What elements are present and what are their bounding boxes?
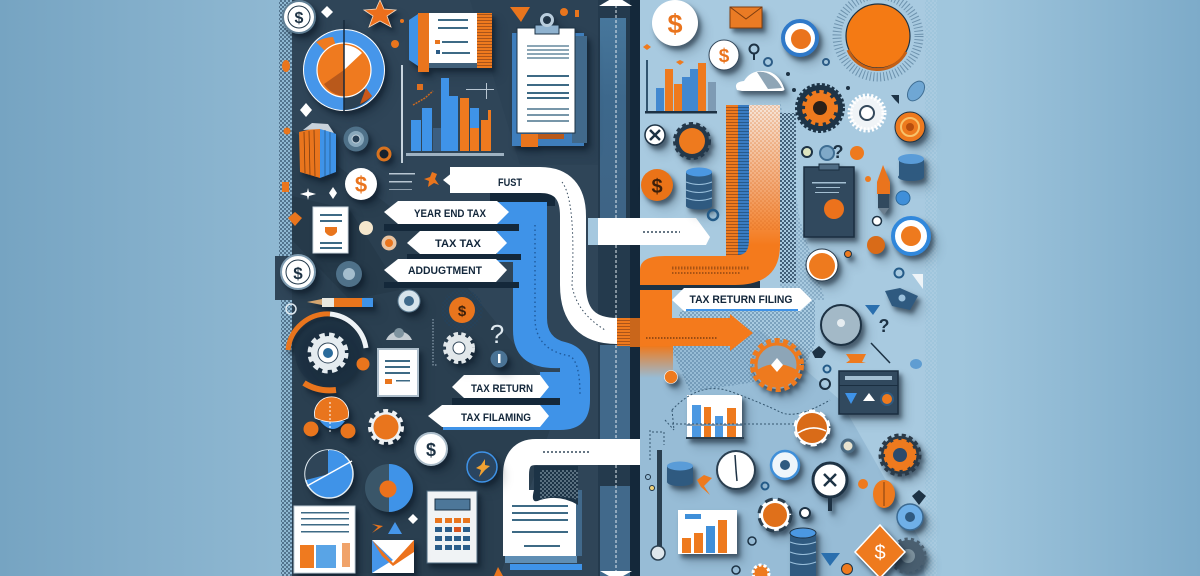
icon: orange badge gear: [795, 411, 829, 445]
icon: gear behind diamond: [892, 540, 924, 572]
icon: dotted connectors: [650, 389, 830, 460]
icon: sparkles top: [300, 6, 337, 200]
icon: orange dollar coin right: [652, 0, 698, 46]
icon: small dollar coin: [709, 40, 739, 70]
arrow label: Tax Return: [452, 375, 549, 398]
icon: small blue ring: [708, 210, 718, 220]
icon: dollar coin top left: $: [295, 10, 304, 27]
icon: star: [364, 0, 396, 27]
icon: ring small: [286, 304, 296, 314]
icon: scattered dots right top: [643, 44, 910, 226]
panel: light right side: [640, 0, 937, 576]
icon: open book: [409, 13, 492, 72]
icon: wrench coin: [645, 125, 665, 145]
icon: star badge: [467, 452, 497, 482]
chart: bars top right: [645, 60, 717, 114]
icon: orange ring: [378, 148, 390, 160]
icon: clock: [717, 451, 755, 489]
arrow label: Year End Tax: [384, 201, 509, 224]
blue flow band: [384, 192, 590, 430]
icon: pencil: [877, 165, 890, 215]
icon: orange dollar coin: $: [355, 172, 367, 197]
icon: note lines: [389, 173, 415, 190]
icon: orange dot: [664, 370, 678, 384]
icon: white gear right: [850, 96, 884, 130]
icon: dotted bracket: [433, 319, 438, 365]
icon: orange broken gear: [759, 499, 791, 531]
icon: blue coin: [771, 451, 799, 479]
icon: marks cluster right: [812, 305, 922, 389]
arrow label: Tax Return Filing: [672, 288, 812, 311]
arrow label: Tax Return: TAX RETURN: [471, 383, 533, 395]
arrow label: Adjustment: ADDUGTMENT: [408, 265, 482, 277]
arrow label: Tax Filaming: TAX FILAMING: [461, 412, 531, 424]
chart: bars card bottom: [678, 510, 737, 554]
icon: stacked binders: [299, 123, 336, 178]
icon: magnifier: [750, 44, 758, 60]
icon: small ring: [894, 268, 923, 289]
orange pipe: [640, 105, 796, 290]
chart: disc pie: [365, 464, 413, 512]
white document connector: [503, 452, 640, 570]
orange arrow: [630, 290, 753, 378]
icon: orange dollar coin: [345, 168, 377, 200]
arrow label: Adjustment: [384, 259, 507, 282]
icon: orange spiral coin: [895, 112, 925, 142]
icon: large magnifier: [821, 305, 861, 345]
icon: dollar coin: [415, 433, 447, 465]
icon: coin small: [842, 440, 854, 452]
icon: flower: [359, 221, 373, 235]
white band: horizontal connector: [588, 218, 710, 245]
icon: coin stack small: [667, 462, 693, 486]
arrow label: Tax Return Filing: TAX RETURN FILING: [690, 294, 792, 306]
icon: small arrows: [372, 514, 503, 576]
icon: orange gear coin: [806, 249, 838, 281]
icon: calculator: [427, 491, 477, 563]
icon: leaf: [891, 78, 928, 104]
icon: small orange marks: [282, 7, 579, 226]
icon: question mark right: ?: [832, 142, 844, 162]
icon: orange coin lower: [844, 236, 885, 258]
icon: clipboard: [512, 14, 587, 147]
icon: dollar coin: $: [426, 440, 436, 460]
icon: orange dot: [356, 358, 370, 370]
icon: orange brain: [873, 480, 895, 508]
icon: orange dollar: [641, 169, 673, 201]
icon: orange coin in halftone: [441, 289, 483, 331]
icon: disc lower: [336, 261, 362, 287]
icon: disc: [344, 126, 368, 152]
chart: bars in white card: [686, 395, 744, 439]
icon: vertical gauge: [651, 450, 665, 560]
arrow label: Tax Tax: [407, 231, 507, 254]
icon: dollar coin lower: $: [293, 264, 303, 283]
icon: orange dollar diamond: [855, 525, 905, 576]
icon: blue badge: [783, 21, 817, 55]
icon: orange dollar coin right: $: [667, 9, 683, 39]
icon: ring: [800, 508, 810, 518]
icon: dark clipboard: [804, 164, 854, 237]
icon: dollar coin lower: [281, 255, 315, 289]
icon: gear with orange core: [371, 412, 401, 442]
icon: document with lines: [378, 349, 418, 396]
central spine: [598, 0, 640, 576]
icon: orange gear coin: [675, 124, 709, 158]
icon: orange dollar diamond: $: [874, 542, 886, 564]
icon: orange node cluster: [304, 397, 356, 438]
icon: blue spiral coin: [897, 504, 923, 530]
panel: dark left side: [275, 0, 640, 576]
icon: half coin: [386, 328, 412, 340]
icon: orange dark gear: [881, 436, 919, 474]
icon: orange envelope: [730, 7, 762, 28]
icon: orange dollar: $: [651, 176, 663, 198]
icon: small dollar coin: $: [719, 46, 730, 67]
icon: dollar coin top left: [283, 1, 315, 33]
arrow label: Year End Tax: YEAR END TAX: [414, 208, 487, 220]
icon: coin stack: [686, 168, 712, 210]
icon: marks cluster right: ?: [878, 316, 890, 336]
icon: orange gear large: [753, 341, 801, 389]
icon: small triangle and coin: [732, 553, 852, 574]
arrow label: Fust: FUST: [498, 177, 522, 189]
icon: document left: [313, 207, 348, 253]
chart: pie: [305, 450, 353, 498]
icon: pen: [307, 298, 373, 307]
arrow label: Fust: [443, 168, 530, 192]
icon: database: [790, 528, 816, 576]
icon: orange sun: [837, 0, 919, 77]
arrow label: Tax Tax: TAX TAX: [435, 238, 482, 250]
white flow band: [450, 180, 632, 346]
icon: orange dot with cap: [382, 236, 396, 250]
icon: gear with orange arc: [288, 314, 366, 390]
icon: gear bottom: [753, 565, 769, 576]
icon: envelope: [372, 540, 414, 573]
icon: orange splash: [424, 172, 439, 187]
icon: report document: [294, 506, 355, 573]
icon: cloud: [736, 71, 784, 91]
icon: blue badge lower: [893, 218, 929, 254]
icon: coin top small: [398, 290, 420, 312]
icon: white gear: [446, 335, 472, 361]
icon: orange ring and gem: [858, 479, 926, 505]
arrow label: Tax Filaming: [428, 405, 549, 427]
icon: orange gear with halftone: [797, 85, 843, 131]
icon: info coin: [490, 350, 508, 368]
icon: small items mid: [646, 474, 768, 545]
icon: dashboard panel: [839, 371, 898, 414]
icon: small coin stack: [898, 154, 924, 181]
chart: tall bar chart: [401, 65, 504, 163]
icon: question mark: ?: [490, 319, 504, 349]
icon: orange coin in halftone: $: [458, 303, 467, 320]
chart: donut pie: [303, 20, 385, 112]
icon: eye badge: [885, 288, 918, 310]
icon: tool magnifier: [813, 463, 847, 511]
